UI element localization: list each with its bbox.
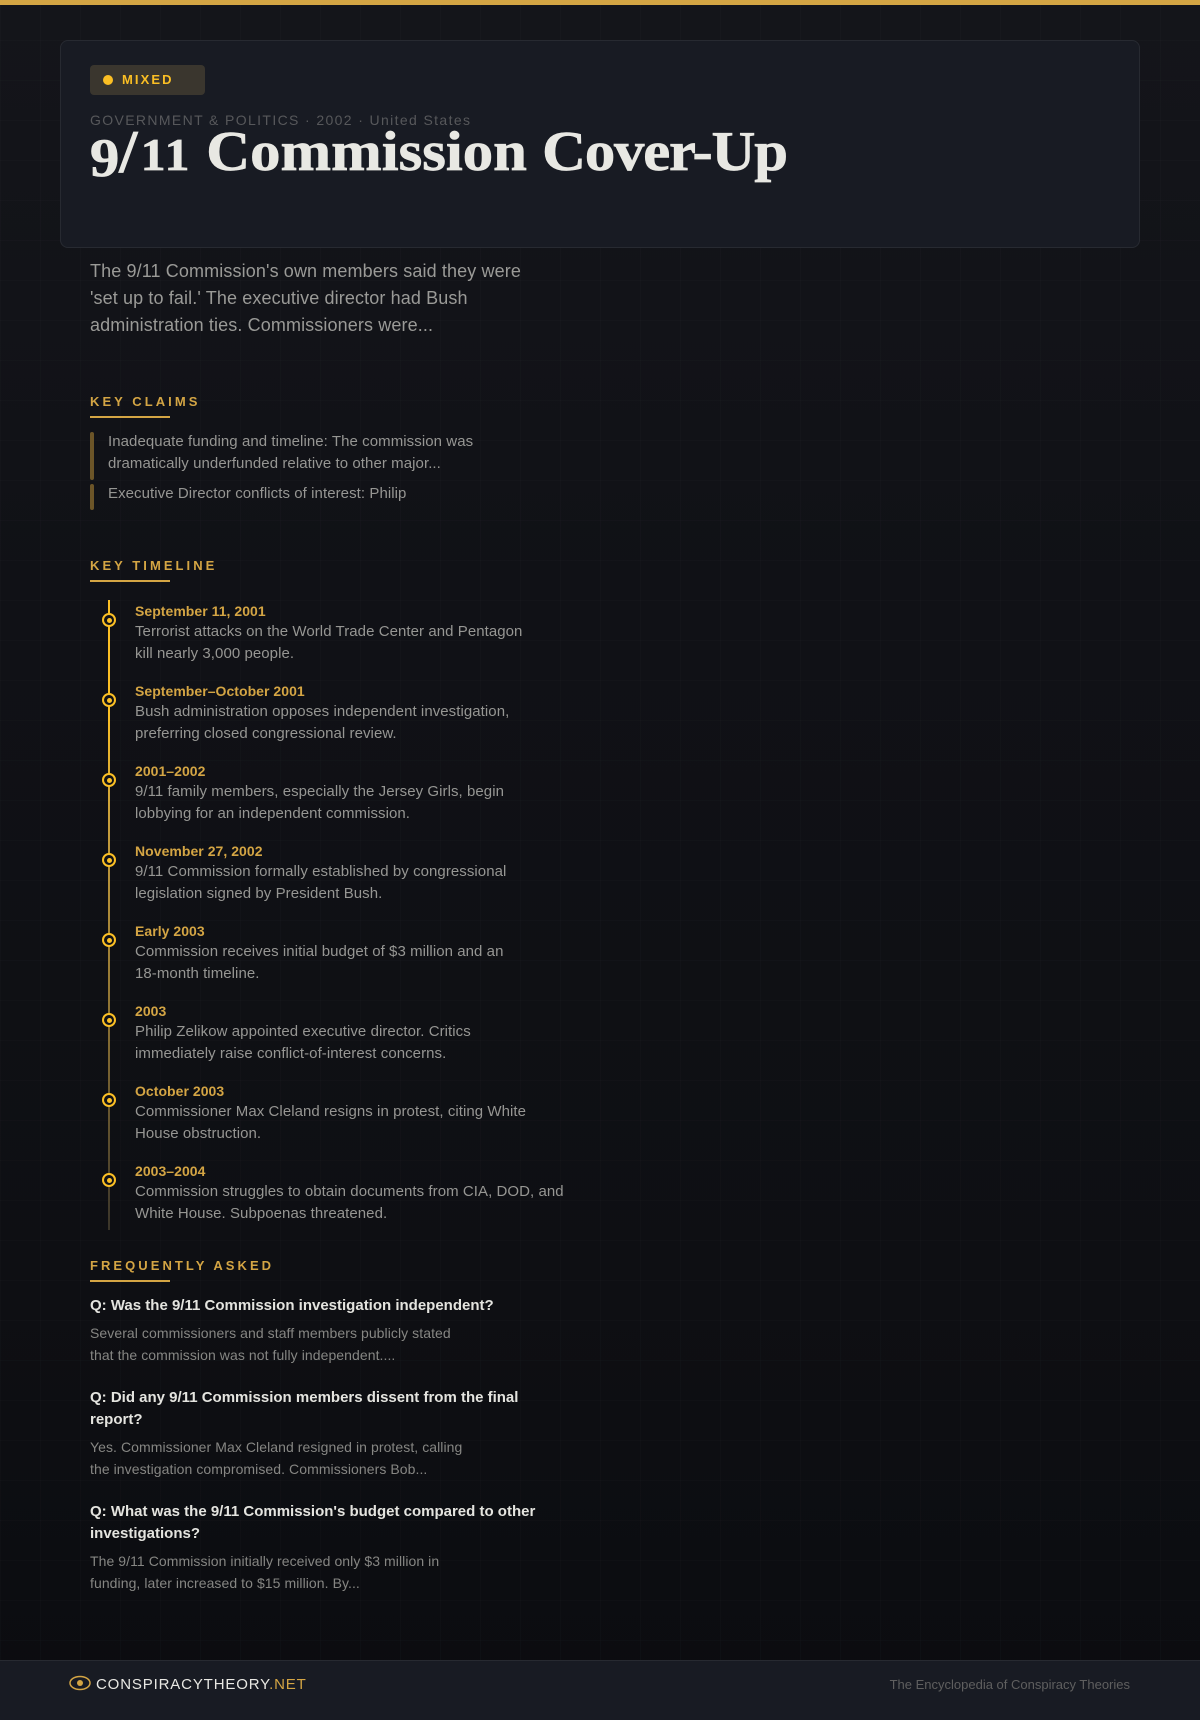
event 6: immediately raise conflict-of-interest concerns. [135, 1045, 446, 1062]
tagline: The Encyclopedia of Conspiracy Theories [890, 1677, 1130, 1692]
event 6: 2003 [135, 1003, 166, 1019]
event 3: lobbying for an independent commission. [135, 805, 410, 822]
event 8: 2003–2004 [135, 1163, 205, 1179]
verdict badge: mixed [90, 65, 205, 95]
icon: status dot [103, 75, 113, 85]
event 7: Commissioner Max Cleland resigns in protest, citing White [135, 1103, 526, 1120]
event 6: Philip Zelikow appointed executive director. Critics [135, 1023, 471, 1040]
heading: frequently asked: FREQUENTLY ASKED [90, 1258, 274, 1273]
claim 1: Inadequate funding and timeline: The commission was [108, 433, 473, 450]
event 4: 9/11 Commission formally established by congressional [135, 863, 506, 880]
icon: eye logo [69, 1676, 91, 1690]
badge label: MIXED [122, 72, 174, 87]
event 5: 18-month timeline. [135, 965, 259, 982]
panel: header card [60, 40, 1140, 248]
event 6 [102, 1003, 471, 1062]
top accent bar [0, 0, 1200, 5]
claim 2: Executive Director conflicts of interest: Philip [108, 485, 406, 502]
faq 1: Several commissioners and staff members publicly stated [90, 1325, 451, 1341]
faq 3: The 9/11 Commission initially received only $3 million in [90, 1553, 439, 1569]
faq 2: Yes. Commissioner Max Cleland resigned in protest, calling [90, 1439, 462, 1455]
event 2: preferring closed congressional review. [135, 725, 397, 742]
event 8: Commission struggles to obtain documents from CIA, DOD, and [135, 1183, 564, 1200]
event 4: legislation signed by President Bush. [135, 885, 382, 902]
brand name: CONSPIRACYTHEORY.NET [96, 1676, 307, 1693]
section: frequently asked [90, 1258, 536, 1591]
faq 2: the investigation compromised. Commissioners Bob... [90, 1461, 427, 1477]
event 8: White House. Subpoenas threatened. [135, 1205, 387, 1222]
event 7 [102, 1083, 526, 1142]
category and year line: GOVERNMENT & POLITICS · 2002 · United States [90, 112, 471, 128]
section: key claims [90, 394, 473, 510]
faq 2: Q: Did any 9/11 Commission members dissent from the final [90, 1389, 518, 1406]
timeline [102, 600, 564, 1230]
event 8 [102, 1163, 564, 1222]
event 1 [102, 603, 522, 662]
event 7: House obstruction. [135, 1125, 261, 1142]
event 3 [102, 763, 504, 822]
event 5: Early 2003 [135, 923, 205, 939]
footer [0, 1660, 1200, 1720]
claim 1 [90, 432, 473, 480]
summary text: The 9/11 Commission's own members said they were [90, 261, 521, 281]
faq 3: funding, later increased to $15 million. By... [90, 1575, 360, 1591]
summary text: 'set up to fail.' The executive director had Bush [90, 288, 468, 308]
heading: key claims: KEY CLAIMS [90, 394, 200, 409]
claim 1: dramatically underfunded relative to other major... [108, 455, 441, 472]
event 4: November 27, 2002 [135, 843, 263, 859]
faq 3: Q: What was the 9/11 Commission's budget compared to other [90, 1503, 535, 1520]
event 1: kill nearly 3,000 people. [135, 645, 294, 662]
event 5 [102, 923, 504, 982]
event 1: Terrorist attacks on the World Trade Center and Pentagon [135, 623, 522, 640]
event 1: September 11, 2001 [135, 603, 266, 619]
event 3: 9/11 family members, especially the Jersey Girls, begin [135, 783, 504, 800]
event 2: September–October 2001 [135, 683, 305, 699]
title: 9/11 Commission Cover-Up [90, 119, 787, 188]
summary text [90, 261, 521, 335]
faq 3 [90, 1503, 536, 1591]
faq 2 [90, 1389, 518, 1477]
event 2 [102, 683, 509, 742]
event 4 [102, 843, 506, 902]
faq 2: report? [90, 1411, 142, 1428]
event 3: 2001–2002 [135, 763, 205, 779]
event 5: Commission receives initial budget of $3 million and an [135, 943, 504, 960]
faq 1: that the commission was not fully independent.... [90, 1347, 395, 1363]
heading: key timeline: KEY TIMELINE [90, 558, 217, 573]
faq 3: investigations? [90, 1525, 200, 1542]
faq 1 [90, 1297, 494, 1363]
faq 1: Q: Was the 9/11 Commission investigation independent? [90, 1297, 494, 1314]
event 7: October 2003 [135, 1083, 224, 1099]
summary text: administration ties. Commissioners were... [90, 315, 433, 335]
event 2: Bush administration opposes independent investigation, [135, 703, 509, 720]
claim 2 [90, 484, 406, 510]
